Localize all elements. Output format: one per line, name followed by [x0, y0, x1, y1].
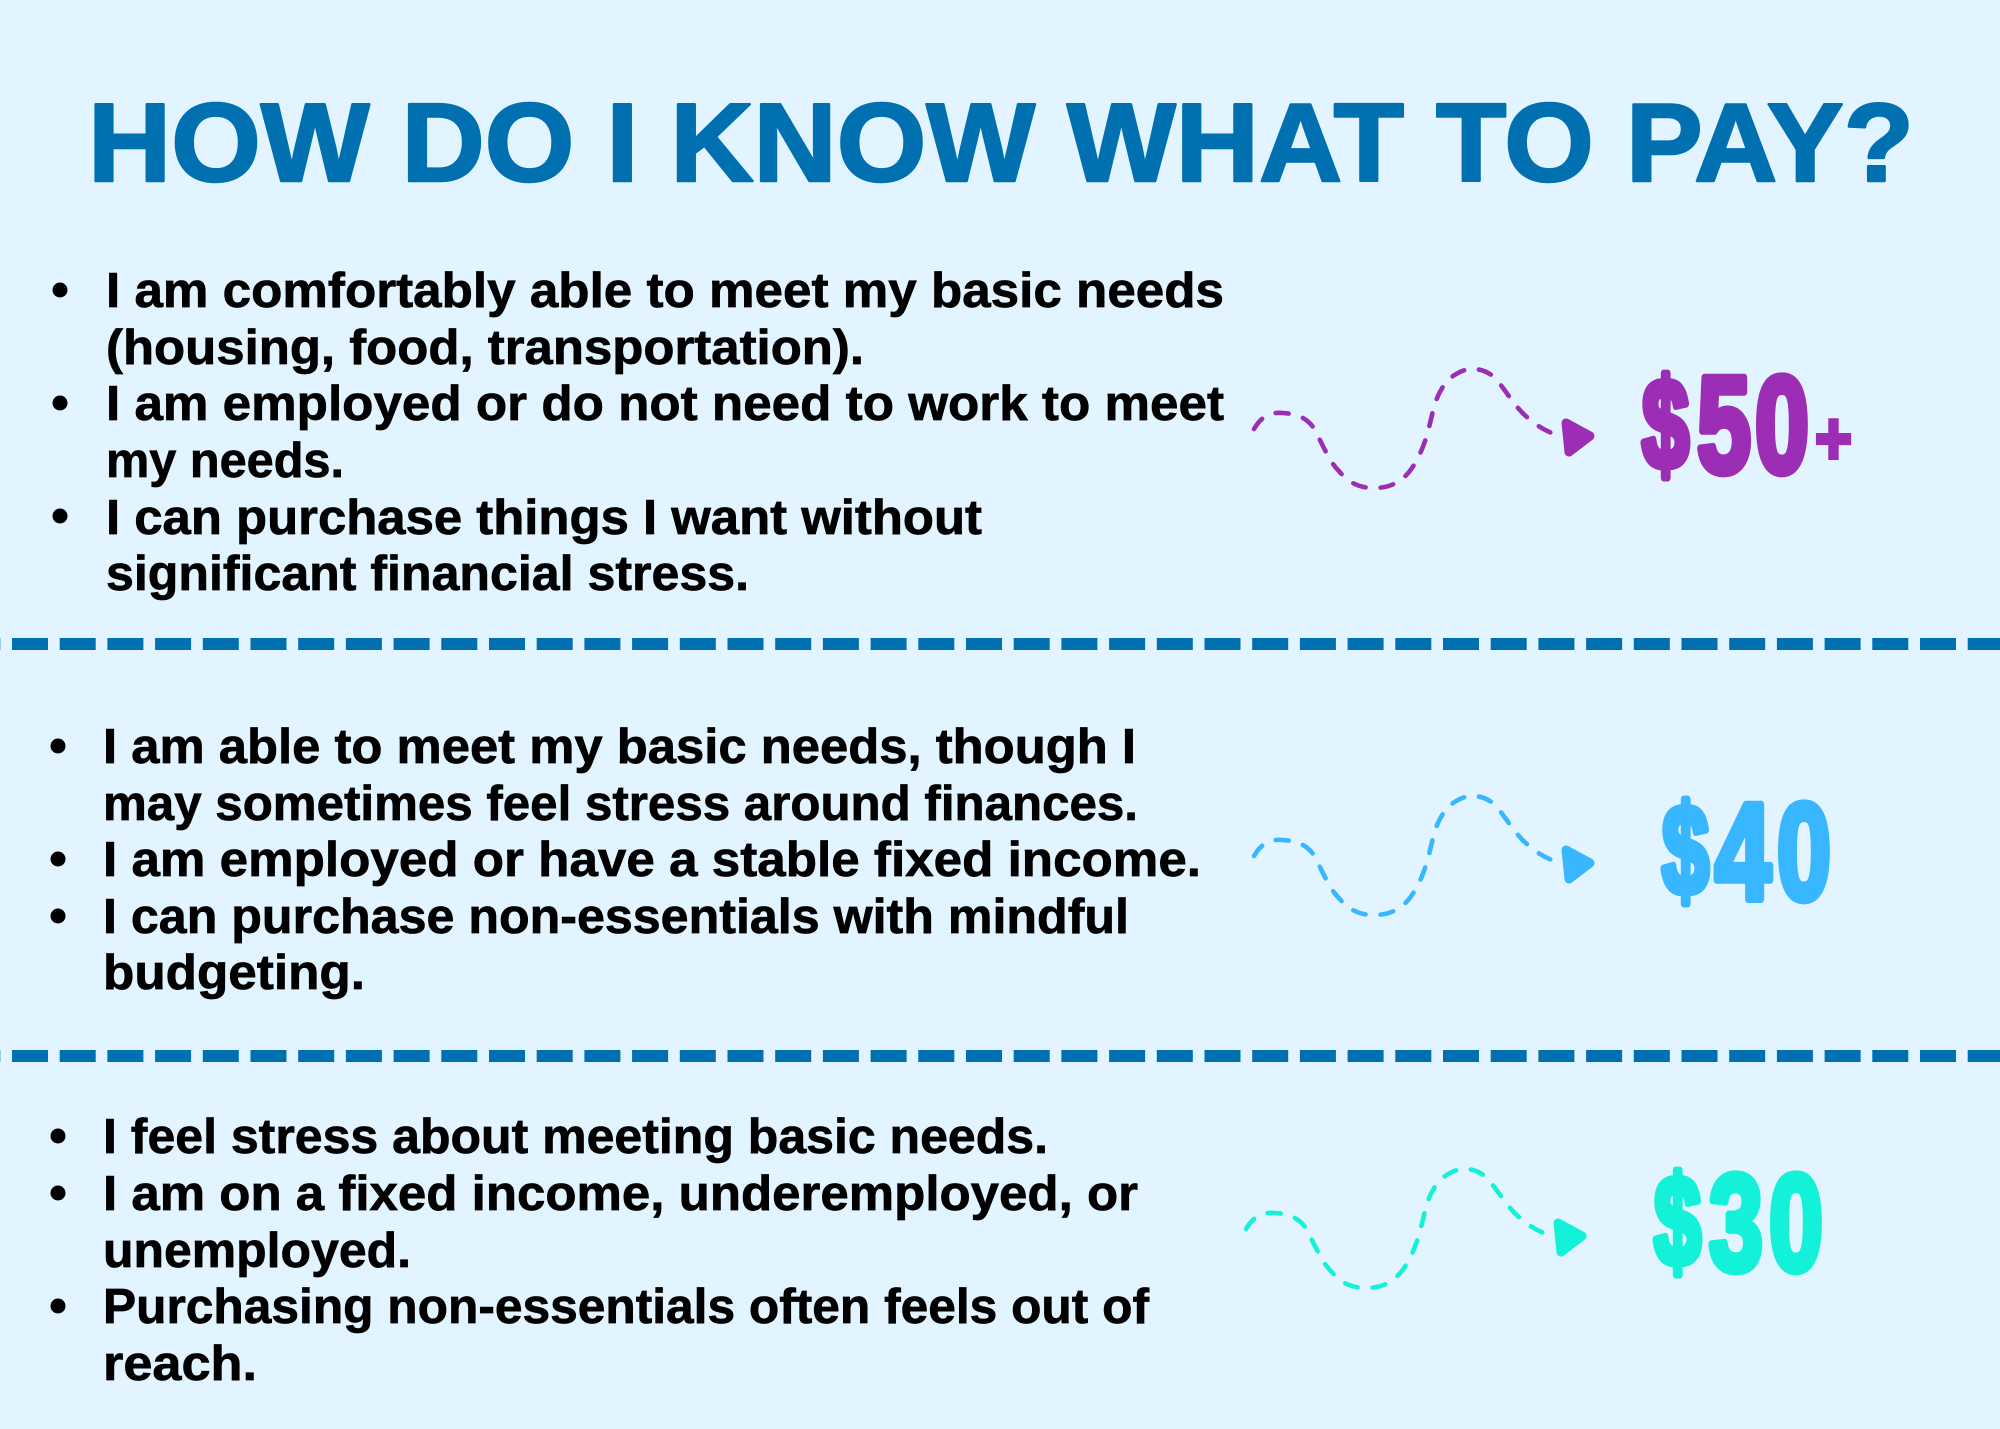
text block: $50+ criteria: (housing, food, transportation).	[106, 321, 864, 375]
text block: $40 criteria: I can purchase non-essentials with mindful	[103, 890, 1129, 944]
divider: bottom dashed line	[0, 1050, 2000, 1062]
divider: top dashed line	[0, 638, 2000, 650]
panel: $40 tier	[50, 720, 1831, 1000]
arrow: purple dashed	[1254, 369, 1590, 488]
text block: $50+ criteria: my needs.	[106, 434, 344, 488]
text block: $50+ criteria	[52, 264, 1224, 601]
text block: $40 criteria: I am employed or have a stable fixed income.	[103, 833, 1201, 887]
text block: $50+ criteria: I can purchase things I want without	[106, 491, 982, 545]
price: $40: $	[1662, 779, 1709, 921]
arrow: blue dashed	[1254, 796, 1590, 915]
text block: $30 criteria: I feel stress about meeting basic needs.	[103, 1110, 1048, 1164]
arrow: teal dashed	[1246, 1169, 1582, 1288]
price: $50+: 5	[1697, 349, 1751, 502]
text block: $30 criteria: unemployed.	[103, 1224, 411, 1278]
price: $30	[1654, 1147, 1823, 1300]
price: $40	[1662, 776, 1831, 929]
text block: $30 criteria: reach.	[103, 1337, 257, 1391]
text block: $50+ criteria: I am employed or do not need to work to meet	[106, 377, 1224, 431]
text block: $50+ criteria: I am comfortably able to meet my basic needs	[106, 264, 1224, 318]
text block: $50+ criteria: significant financial stress.	[106, 547, 749, 601]
price: $40: 4	[1715, 776, 1771, 929]
price: $50+: $	[1642, 353, 1689, 495]
panel: $50+ tier	[52, 264, 1852, 601]
text block: $30 criteria: Purchasing non-essentials often feels out of	[103, 1280, 1150, 1334]
price: $50+: 0	[1755, 349, 1809, 502]
price: $50+: +	[1815, 397, 1852, 480]
panel: $30 tier	[50, 1110, 1823, 1391]
text block: $30 criteria: I am on a fixed income, underemployed, or	[103, 1167, 1138, 1221]
title: HOW DO I KNOW WHAT TO PAY?	[88, 81, 1914, 205]
price: $30: 0	[1769, 1147, 1823, 1300]
price: $50+	[1642, 349, 1852, 502]
text block: $40 criteria: I am able to meet my basic needs, though I	[103, 720, 1136, 774]
text block: $30 criteria	[50, 1110, 1150, 1391]
price: $40: 0	[1777, 776, 1831, 929]
price: $30: 3	[1709, 1147, 1763, 1300]
text block: $40 criteria	[50, 720, 1201, 1000]
text block: $40 criteria: budgeting.	[103, 946, 365, 1000]
price: $30: $	[1654, 1150, 1701, 1292]
text block: $40 criteria: may sometimes feel stress around finances.	[103, 777, 1138, 831]
